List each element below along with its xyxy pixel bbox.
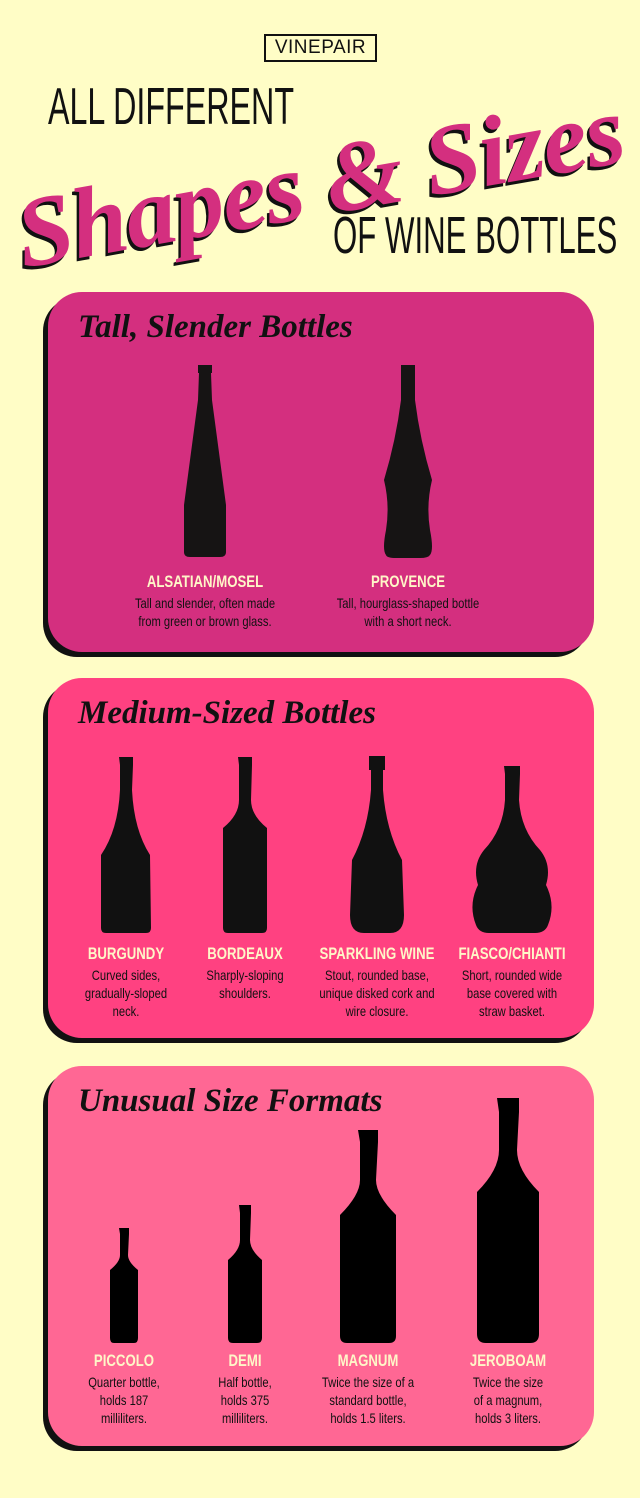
label: Bordeaux: BORDEAUX [207, 945, 283, 963]
panel: medium-sized bottles [48, 678, 594, 1038]
logo: VinePair: VINEPAIR [275, 37, 366, 58]
label: Piccolo: milliliters. [101, 1410, 147, 1426]
label: Magnum: standard bottle, [329, 1392, 407, 1408]
heading: Medium-Sized Bottles: Medium-Sized Bottles [78, 695, 376, 731]
label: Piccolo [88, 1352, 160, 1426]
label: Provence: with a short neck. [364, 613, 452, 629]
label: Sparkling: wire closure. [346, 1003, 408, 1019]
label: Jeroboam: holds 3 liters. [475, 1410, 541, 1426]
bottle: provence [384, 365, 432, 558]
label: Demi: holds 375 [221, 1392, 269, 1408]
bottle: demi [228, 1205, 262, 1343]
label: Jeroboam: JEROBOAM [470, 1352, 546, 1370]
label: Fiasco [458, 945, 566, 1019]
label: Magnum [322, 1352, 414, 1426]
label: Sparkling: Stout, rounded base, [325, 967, 429, 983]
label: Alsatian: ALSATIAN/MOSEL [147, 573, 263, 591]
panel: tall slender bottles [48, 292, 594, 652]
heading: Tall, Slender Bottles: Tall, Slender Bottles [78, 309, 353, 345]
label: Alsatian: Tall and slender, often made [135, 595, 275, 611]
label: Magnum: holds 1.5 liters. [330, 1410, 406, 1426]
label: Jeroboam: Twice the size [473, 1374, 543, 1390]
label: Provence: PROVENCE [371, 573, 445, 591]
label: Alsatian: from green or brown glass. [138, 613, 272, 629]
label: Bordeaux [206, 945, 284, 1001]
label: Bordeaux: Sharply-sloping [206, 967, 284, 983]
label: Alsatian [135, 573, 275, 629]
label: Fiasco: straw basket. [479, 1003, 545, 1019]
label: Sparkling: SPARKLING WINE [320, 945, 434, 963]
label: Provence: Tall, hourglass-shaped bottle [337, 595, 479, 611]
title: All Different: ALL DIFFERENT [48, 78, 294, 136]
label: Demi: DEMI [228, 1352, 262, 1370]
label: Sparkling [319, 945, 435, 1019]
label: Magnum: Twice the size of a [322, 1374, 414, 1390]
label: Burgundy: BURGUNDY [88, 945, 164, 963]
heading: Unusual Size Formats: Unusual Size Formats [78, 1083, 382, 1119]
bottle: burgundy [101, 757, 151, 933]
label: Bordeaux: shoulders. [219, 985, 271, 1001]
panel: unusual size formats [48, 1066, 594, 1446]
label: Burgundy: neck. [113, 1003, 139, 1019]
label: Provence [337, 573, 479, 629]
label: Demi: milliliters. [222, 1410, 268, 1426]
bottle: magnum [340, 1130, 396, 1343]
label: Fiasco: FIASCO/CHIANTI [458, 945, 566, 963]
bottle: fiasco [472, 766, 552, 933]
bottle: sparkling [350, 756, 404, 933]
bottle: bordeaux [223, 757, 267, 933]
label: Burgundy [85, 945, 167, 1019]
logo: VinePair [264, 34, 377, 62]
title: Shapes & Sizes: Shapes & Sizes [8, 74, 632, 289]
bottle: jeroboam [477, 1098, 539, 1343]
title: Of Wine Bottles: OF WINE BOTTLES [333, 207, 617, 265]
label: Piccolo: PICCOLO [94, 1352, 154, 1370]
label: Sparkling: unique disked cork and [319, 985, 435, 1001]
label: Fiasco: Short, rounded wide [462, 967, 562, 983]
label: Burgundy: Curved sides, [92, 967, 160, 983]
label: Magnum: MAGNUM [338, 1352, 398, 1370]
label: Jeroboam [470, 1352, 546, 1426]
label: Demi [218, 1352, 272, 1426]
label: Burgundy: gradually-sloped [85, 985, 167, 1001]
label: Jeroboam: of a magnum, [474, 1392, 542, 1408]
bottle: alsatian [184, 365, 226, 557]
label: Demi: Half bottle, [218, 1374, 272, 1390]
bottle: piccolo [110, 1228, 138, 1343]
label: Fiasco: base covered with [467, 985, 557, 1001]
label: Piccolo: Quarter bottle, [88, 1374, 160, 1390]
label: Piccolo: holds 187 [100, 1392, 148, 1408]
